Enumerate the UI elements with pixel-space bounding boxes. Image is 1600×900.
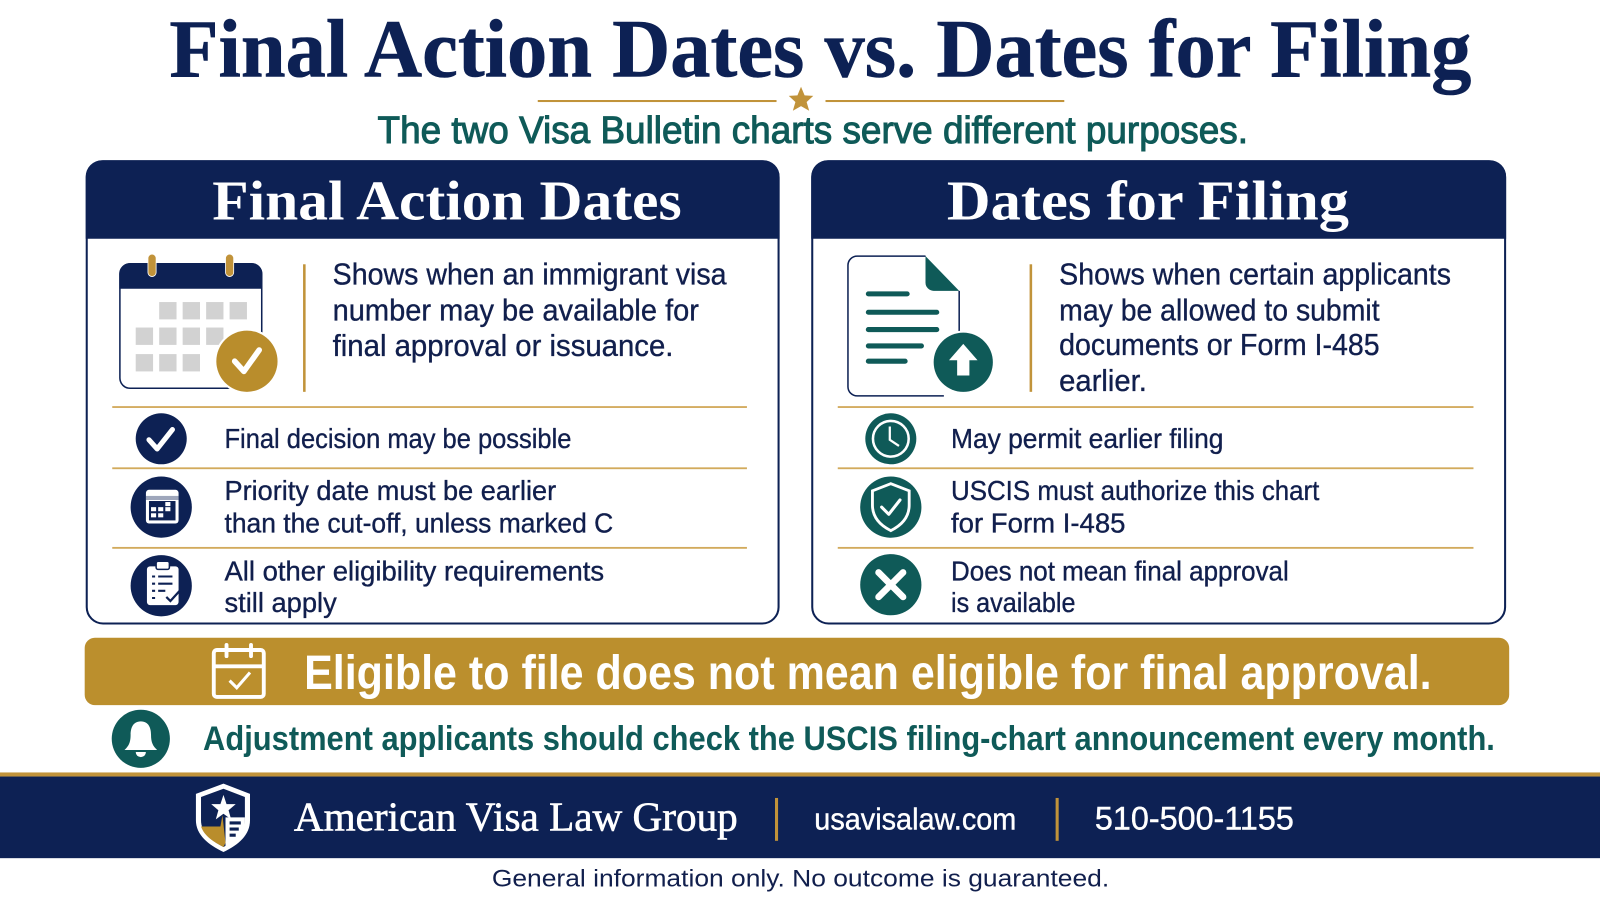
row: not final approval <box>860 554 1289 618</box>
panel heading: Dates for Filing <box>947 170 1349 232</box>
row: final decision: Final decision may be possible <box>224 423 571 454</box>
banner text: Eligible to file does not mean eligible for final approval. <box>304 647 1432 700</box>
description text <box>333 258 727 363</box>
row: eligibility requirements <box>131 555 604 618</box>
row: priority date: Priority date must be earlier <box>224 475 556 506</box>
panel: Final Action Dates <box>86 160 780 623</box>
row: not final approval: Does not mean final approval <box>951 556 1289 587</box>
row: USCIS authorization: USCIS must authorize this chart <box>951 475 1320 506</box>
row: not final approval: is available <box>951 587 1076 618</box>
row: final decision <box>136 413 571 464</box>
description text: earlier. <box>1059 364 1147 398</box>
row: priority date <box>131 475 613 539</box>
row: USCIS authorization: for Form I-485 <box>951 508 1126 539</box>
callout banner <box>85 638 1509 705</box>
description text: number may be available for <box>333 293 699 327</box>
footer bar <box>0 772 1600 858</box>
icon: document with upload <box>848 256 995 396</box>
star divider <box>538 87 1064 111</box>
phone: 510-500-1155 <box>1095 800 1294 837</box>
row: eligibility requirements: still apply <box>224 587 337 618</box>
title: Final Action Dates vs. Dates for Filing <box>169 3 1471 95</box>
firm name: American Visa Law Group <box>294 795 738 840</box>
description text: may be allowed to submit <box>1059 293 1380 327</box>
website: usavisalaw.com <box>814 803 1016 837</box>
panel heading: Final Action Dates <box>212 170 682 232</box>
disclaimer: General information only. No outcome is guaranteed. <box>492 866 1109 893</box>
row: priority date: than the cut-off, unless marked C <box>224 508 613 539</box>
panel header <box>811 160 1506 239</box>
row: earlier filing: May permit earlier filing <box>951 423 1223 454</box>
icon: banner calendar <box>214 645 264 697</box>
reminder <box>112 710 1495 768</box>
description text: Shows when certain applicants <box>1059 258 1451 292</box>
panel: Dates for Filing <box>811 160 1506 623</box>
icon: bell <box>112 710 170 768</box>
panel header <box>86 160 780 239</box>
icon: shield logo <box>196 784 250 852</box>
description text <box>1059 258 1451 398</box>
row: earlier filing <box>865 413 1223 464</box>
description text: Shows when an immigrant visa <box>333 258 727 292</box>
description text: final approval or issuance. <box>333 329 673 363</box>
description text: documents or Form I-485 <box>1059 328 1380 362</box>
row: USCIS authorization <box>860 475 1320 539</box>
row: eligibility requirements: All other eligibility requirements <box>224 556 604 587</box>
subtitle: The two Visa Bulletin charts serve different purposes. <box>378 109 1248 151</box>
icon: calendar with check <box>119 254 280 394</box>
